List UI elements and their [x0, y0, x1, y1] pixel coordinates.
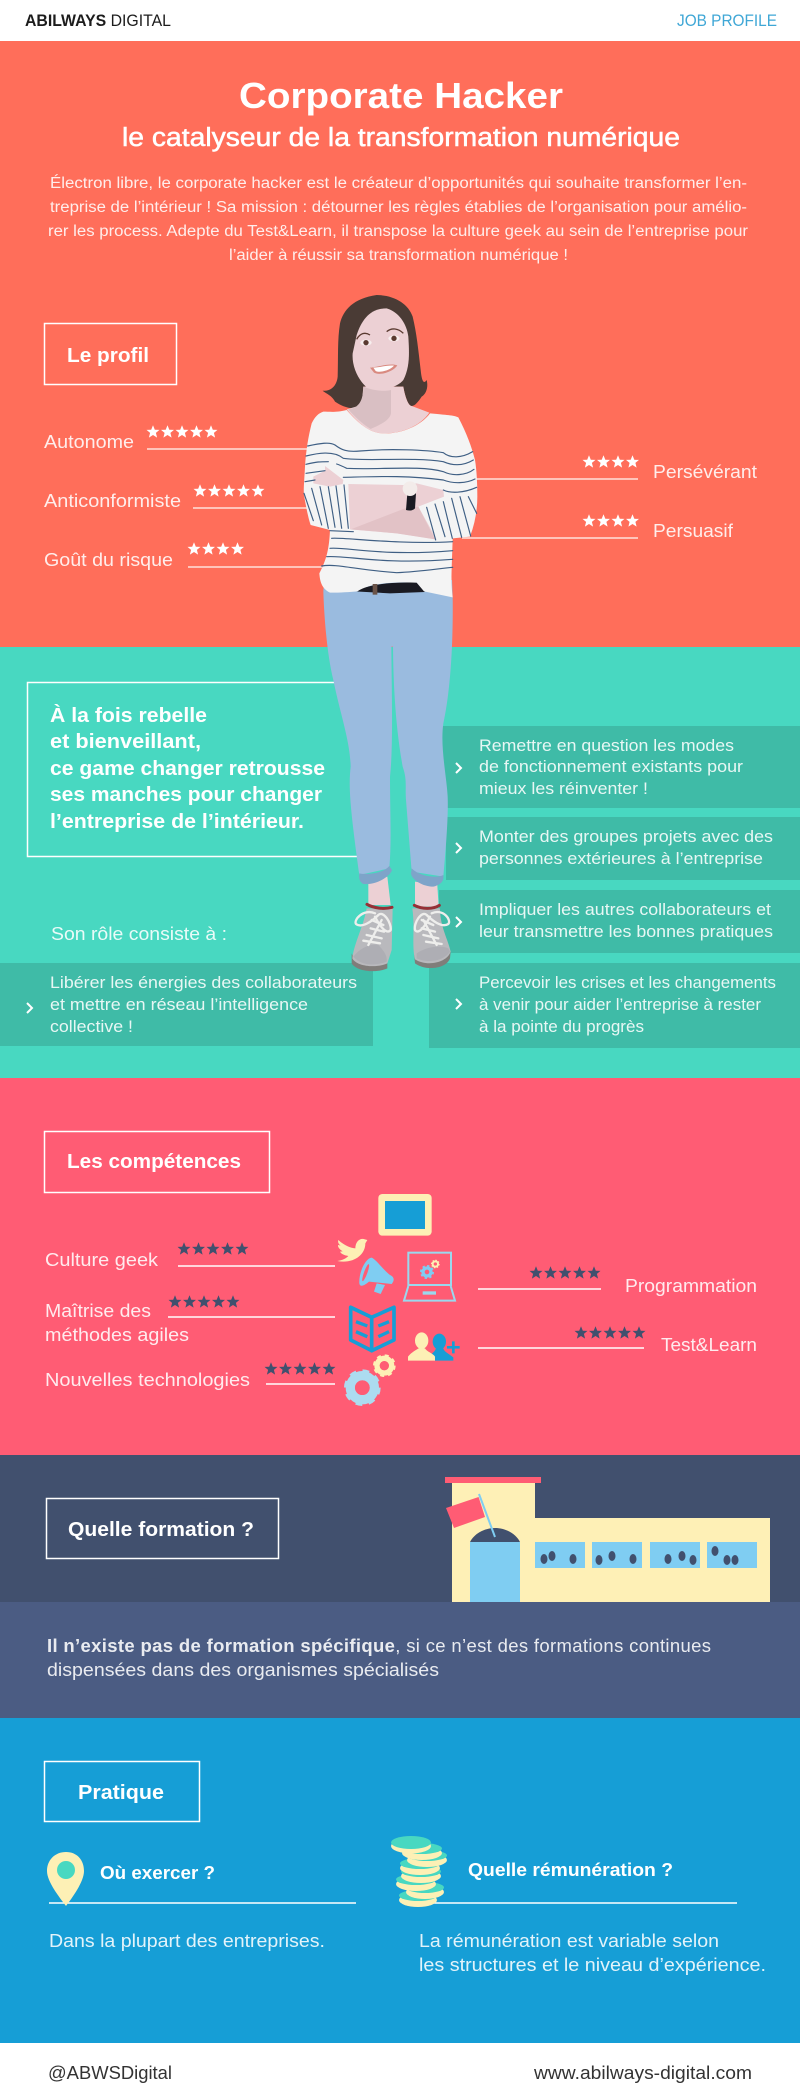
- band: remettre en question: mieux les réinventer !: [479, 779, 648, 798]
- skill: autonome: Autonome: [44, 431, 134, 452]
- skill: anticonformiste: [44, 484, 310, 511]
- block: ou exercer: Dans la plupart des entreprises.: [49, 1930, 325, 1951]
- header bar: [0, 0, 800, 41]
- intro text: [48, 175, 748, 264]
- band: remettre en question: de fonctionnement existants pour: [479, 757, 743, 776]
- panel: formation text: Il n’existe pas de formation spécifique, si ce n’est des formations continues: [47, 1635, 711, 1656]
- callout box: À la fois rebelle: [50, 704, 207, 727]
- skill: perseverant: Persévérant: [653, 461, 757, 482]
- band: liberer: Libérer les énergies des collaborateurs: [50, 973, 357, 992]
- skill: test and learn: Test&Learn: [661, 1334, 757, 1355]
- intro text: l’aider à réussir sa transformation numérique !: [229, 247, 568, 264]
- label: job profile: JOB PROFILE: [677, 11, 777, 30]
- skill: perseverant: [472, 455, 757, 482]
- icon: megaphone: [359, 1258, 394, 1294]
- skill: autonome: [44, 425, 310, 452]
- block: quelle remuneration: les structures et le niveau d’expérience.: [419, 1954, 766, 1975]
- block: ou exercer: [47, 1852, 356, 1951]
- band: liberer: [0, 963, 373, 1046]
- icon: tablet: [378, 1194, 432, 1236]
- subtitle: le catalyseur de la transformation numérique: [122, 124, 680, 152]
- skill: gout du risque: Goût du risque: [44, 549, 173, 570]
- skill: culture geek: Culture geek: [45, 1249, 159, 1270]
- panel: formation text: dispensées dans des organismes spécialisés: [47, 1659, 439, 1680]
- panel: formation text: [0, 1602, 800, 1718]
- band: percevoir: [429, 963, 800, 1048]
- heading: le profil: Le profil: [67, 345, 149, 367]
- band: liberer: collective !: [50, 1017, 133, 1036]
- icon: twitter bird: [337, 1239, 367, 1262]
- panel: pratique: [0, 1718, 800, 2043]
- icon: laptop: [404, 1253, 455, 1301]
- heading: pratique: Pratique: [78, 1782, 164, 1804]
- icon: coin stack: [391, 1836, 447, 1907]
- heading: pratique: [44, 1762, 200, 1822]
- skill: methodes agiles: méthodes agiles: [45, 1324, 189, 1345]
- band: percevoir: à la pointe du progrès: [479, 1017, 644, 1036]
- band: remettre en question: Remettre en question les modes: [479, 736, 734, 755]
- footer: @ABWSDigital: [48, 2062, 172, 2083]
- skill: persuasif: Persuasif: [653, 520, 734, 541]
- panel: role: [0, 647, 800, 1078]
- skill: nouvelles technologies: Nouvelles technologies: [45, 1369, 250, 1390]
- band: remettre en question: [441, 726, 800, 808]
- band: impliquer: leur transmettre les bonnes pratiques: [479, 922, 773, 941]
- illustration: school building: [445, 1477, 770, 1602]
- band: groupes projets: Monter des groupes projets avec des: [479, 827, 773, 846]
- text: son role consiste: Son rôle consiste à :: [51, 923, 227, 944]
- icon: large gear: [346, 1371, 379, 1404]
- heading: le profil: [44, 324, 176, 384]
- band: impliquer: [439, 890, 800, 953]
- block: quelle remuneration: [391, 1836, 766, 1975]
- callout box: ce game changer retrousse: [50, 758, 325, 780]
- legs and shoes: [323, 580, 453, 971]
- title: Corporate Hacker: [239, 75, 563, 116]
- skill: anticonformiste: Anticonformiste: [44, 490, 181, 511]
- block: ou exercer: Où exercer ?: [100, 1863, 215, 1883]
- band: percevoir: Percevoir les crises et les changements: [479, 973, 776, 992]
- skill: culture geek: [45, 1242, 335, 1270]
- callout box: ses manches pour changer: [50, 784, 322, 806]
- heading: les competences: Les compétences: [67, 1151, 241, 1173]
- skill: methodes agiles: Maîtrise des: [45, 1300, 151, 1321]
- skill: persuasif: [462, 514, 734, 541]
- skill: programmation: [478, 1266, 757, 1296]
- panel: intro and profile: [0, 41, 800, 647]
- band: percevoir: à venir pour aider l’entreprise à rester: [479, 995, 761, 1014]
- logo: Abilways Digital: ABILWAYS DIGITAL: [25, 11, 171, 30]
- heading: quelle formation: [46, 1498, 278, 1558]
- skill: programmation: Programmation: [625, 1275, 757, 1296]
- heading: quelle formation: Quelle formation ?: [68, 1519, 254, 1541]
- block: quelle remuneration: Quelle rémunération ?: [468, 1860, 673, 1880]
- band: groupes projets: [446, 817, 800, 880]
- footer: [0, 2043, 800, 2099]
- panel: formation: [0, 1455, 800, 1602]
- intro text: rer les process. Adepte du Test&Learn, il transpose la culture geek au sein de l’entreprise pour: [48, 223, 748, 240]
- band: groupes projets: personnes extérieures à l’entreprise: [479, 849, 763, 868]
- block: quelle remuneration: La rémunération est variable selon: [419, 1930, 719, 1951]
- panel: competences: [0, 1078, 800, 1455]
- intro text: Électron libre, le corporate hacker est le créateur d’opportunités qui souhaite transformer l’en-: [50, 175, 747, 192]
- icon: book: [351, 1307, 394, 1351]
- band: liberer: et mettre en réseau l’intelligence: [50, 995, 308, 1014]
- torso and head: [304, 295, 477, 597]
- icon: add user: [408, 1332, 460, 1361]
- skill: gout du risque: [44, 542, 322, 570]
- icon cluster: digital tools: [337, 1194, 460, 1404]
- intro text: treprise de l’intérieur ! Sa mission : détourner les règles établies de l’organisation pour amélio-: [50, 199, 747, 216]
- callout box: l’entreprise de l’intérieur.: [50, 811, 304, 833]
- icon: small gear: [374, 1356, 394, 1376]
- skill: methodes agiles: [45, 1295, 335, 1345]
- band: impliquer: Impliquer les autres collaborateurs et: [479, 900, 771, 919]
- skill: test and learn: [478, 1326, 757, 1355]
- illustration: woman: [304, 295, 477, 971]
- heading: les competences: [44, 1132, 270, 1192]
- callout box: [28, 682, 365, 856]
- skill: nouvelles technologies: [45, 1362, 336, 1390]
- footer: www.abilways-digital.com: [533, 2062, 752, 2083]
- callout box: et bienveillant,: [50, 731, 201, 753]
